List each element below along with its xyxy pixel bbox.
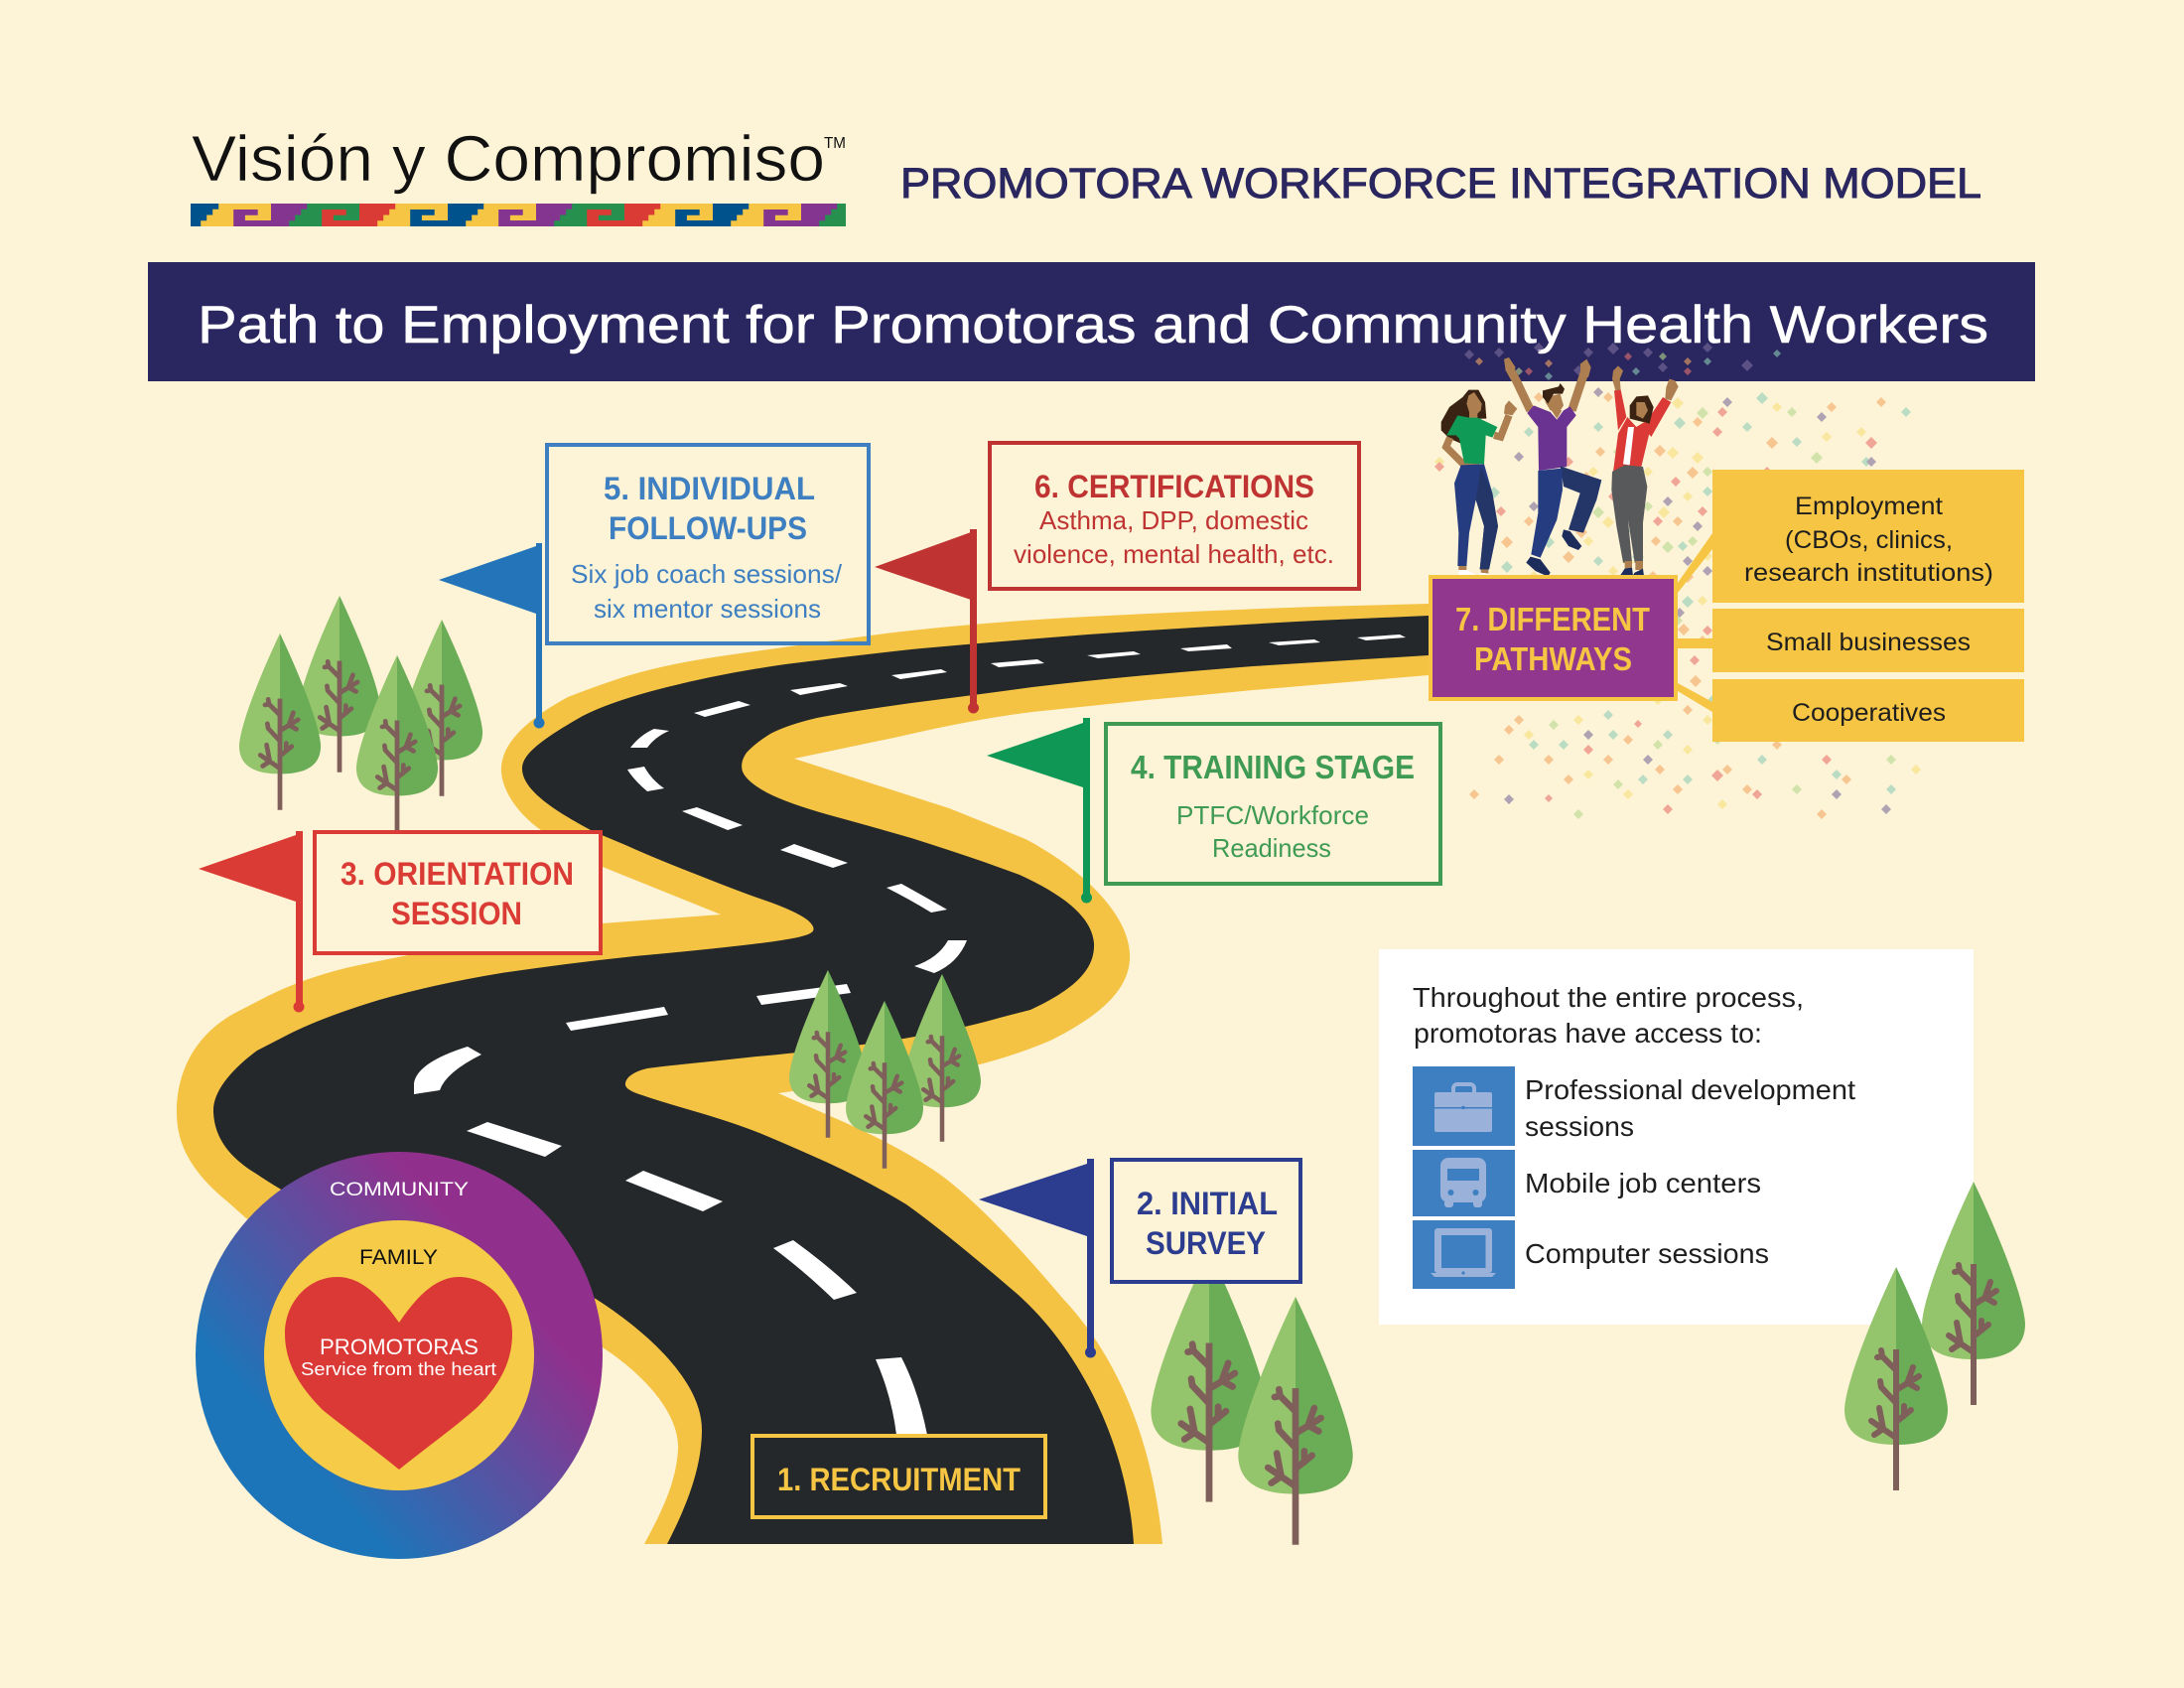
step 2 flag [979,1159,1096,1358]
resources panel: Computer sessions [1525,1238,1769,1269]
pathway: cooperatives [1712,679,2024,742]
people celebrating [1441,357,1679,581]
community circle: PROMOTORAS [320,1335,478,1359]
step 6 box: 6. CERTIFICATIONS [1034,469,1314,504]
resources panel: Mobile job centers [1525,1168,1761,1198]
pathway: employment: Employment [1795,492,1943,520]
step 3 flag [199,831,304,1013]
trees: upper left cluster [239,596,482,832]
step 5 box [547,445,869,643]
step 2 box [1112,1160,1300,1282]
title banner [148,262,2035,381]
person: woman in green [1441,390,1517,581]
pathways group [1431,470,2024,742]
person: woman in red [1611,365,1679,580]
step 3 box [315,832,601,953]
step 2 box: 2. INITIAL [1137,1186,1278,1221]
logo: Vision y Compromiso: Visión y Compromiso [192,122,825,195]
icon: laptop [1413,1220,1515,1289]
road surface [213,616,1429,1544]
step 5 box: six mentor sessions [594,594,821,624]
road lane markings [414,634,1406,1435]
step 7 box: PATHWAYS [1474,640,1632,677]
step 6 box [990,443,1359,589]
pathway: employment [1712,470,2024,603]
logo: Vision y Compromiso [191,133,846,226]
step 2 box: SURVEY [1146,1225,1266,1261]
pathway: small businesses [1712,609,2024,672]
title banner: Path to Employment for Promotoras and Community Health Workers [198,296,1988,354]
subtitle: PROMOTORA WORKFORCE INTEGRATION MODEL [900,160,1981,208]
resources panel: sessions [1525,1111,1634,1142]
community circle: Service from the heart [301,1359,496,1379]
trees: bottom centre pair [1151,1250,1353,1545]
step 5 box: 5. INDIVIDUAL [604,471,815,506]
step 1 box [752,1436,1045,1517]
logo pattern strip [145,204,851,226]
step 6 box: Asthma, DPP, domestic [1039,505,1308,535]
resources panel: promotoras have access to: [1414,1018,1762,1049]
logo: Vision y Compromiso: TM [824,135,846,152]
community circle: FAMILY [359,1246,438,1269]
step 7 box [1431,577,1676,699]
pathway: small businesses: Small businesses [1766,629,1971,656]
step 7 box: 7. DIFFERENT [1455,601,1650,637]
trees: centre cluster [789,970,981,1169]
step 1 box: 1. RECRUITMENT [777,1462,1021,1497]
step 5 flag [439,543,544,729]
resources panel: Professional development [1525,1074,1855,1105]
pathway: employment: research institutions) [1744,559,1993,587]
step 5 box: FOLLOW-UPS [609,510,807,546]
step 6 box: violence, mental health, etc. [1014,539,1334,569]
step 4 box: Readiness [1212,833,1331,863]
icon: briefcase [1413,1066,1515,1146]
pathway: cooperatives: Cooperatives [1792,699,1946,727]
icon: bus [1413,1150,1515,1216]
confetti [1434,343,1921,819]
trees: lower right pair [1844,1182,2025,1490]
step 4 flag [987,718,1092,904]
step 6 flag [875,529,979,713]
resources panel [1379,949,1974,1325]
road shoulder [177,604,1429,1544]
step 5 box: Six job coach sessions/ [571,559,843,589]
step 3 box: SESSION [391,896,522,931]
resources panel: Throughout the entire process, [1413,982,1804,1013]
step 4 box [1106,724,1440,884]
connector lines [1678,533,1713,712]
community circle: COMMUNITY [330,1180,469,1200]
step 4 box: PTFC/Workforce [1176,800,1369,830]
community circle [196,1152,603,1559]
step 4 box: 4. TRAINING STAGE [1131,749,1415,785]
heart [285,1277,512,1470]
pathway: employment: (CBOs, clinics, [1785,526,1953,554]
person: man in purple [1504,357,1601,577]
step 3 box: 3. ORIENTATION [341,856,574,892]
